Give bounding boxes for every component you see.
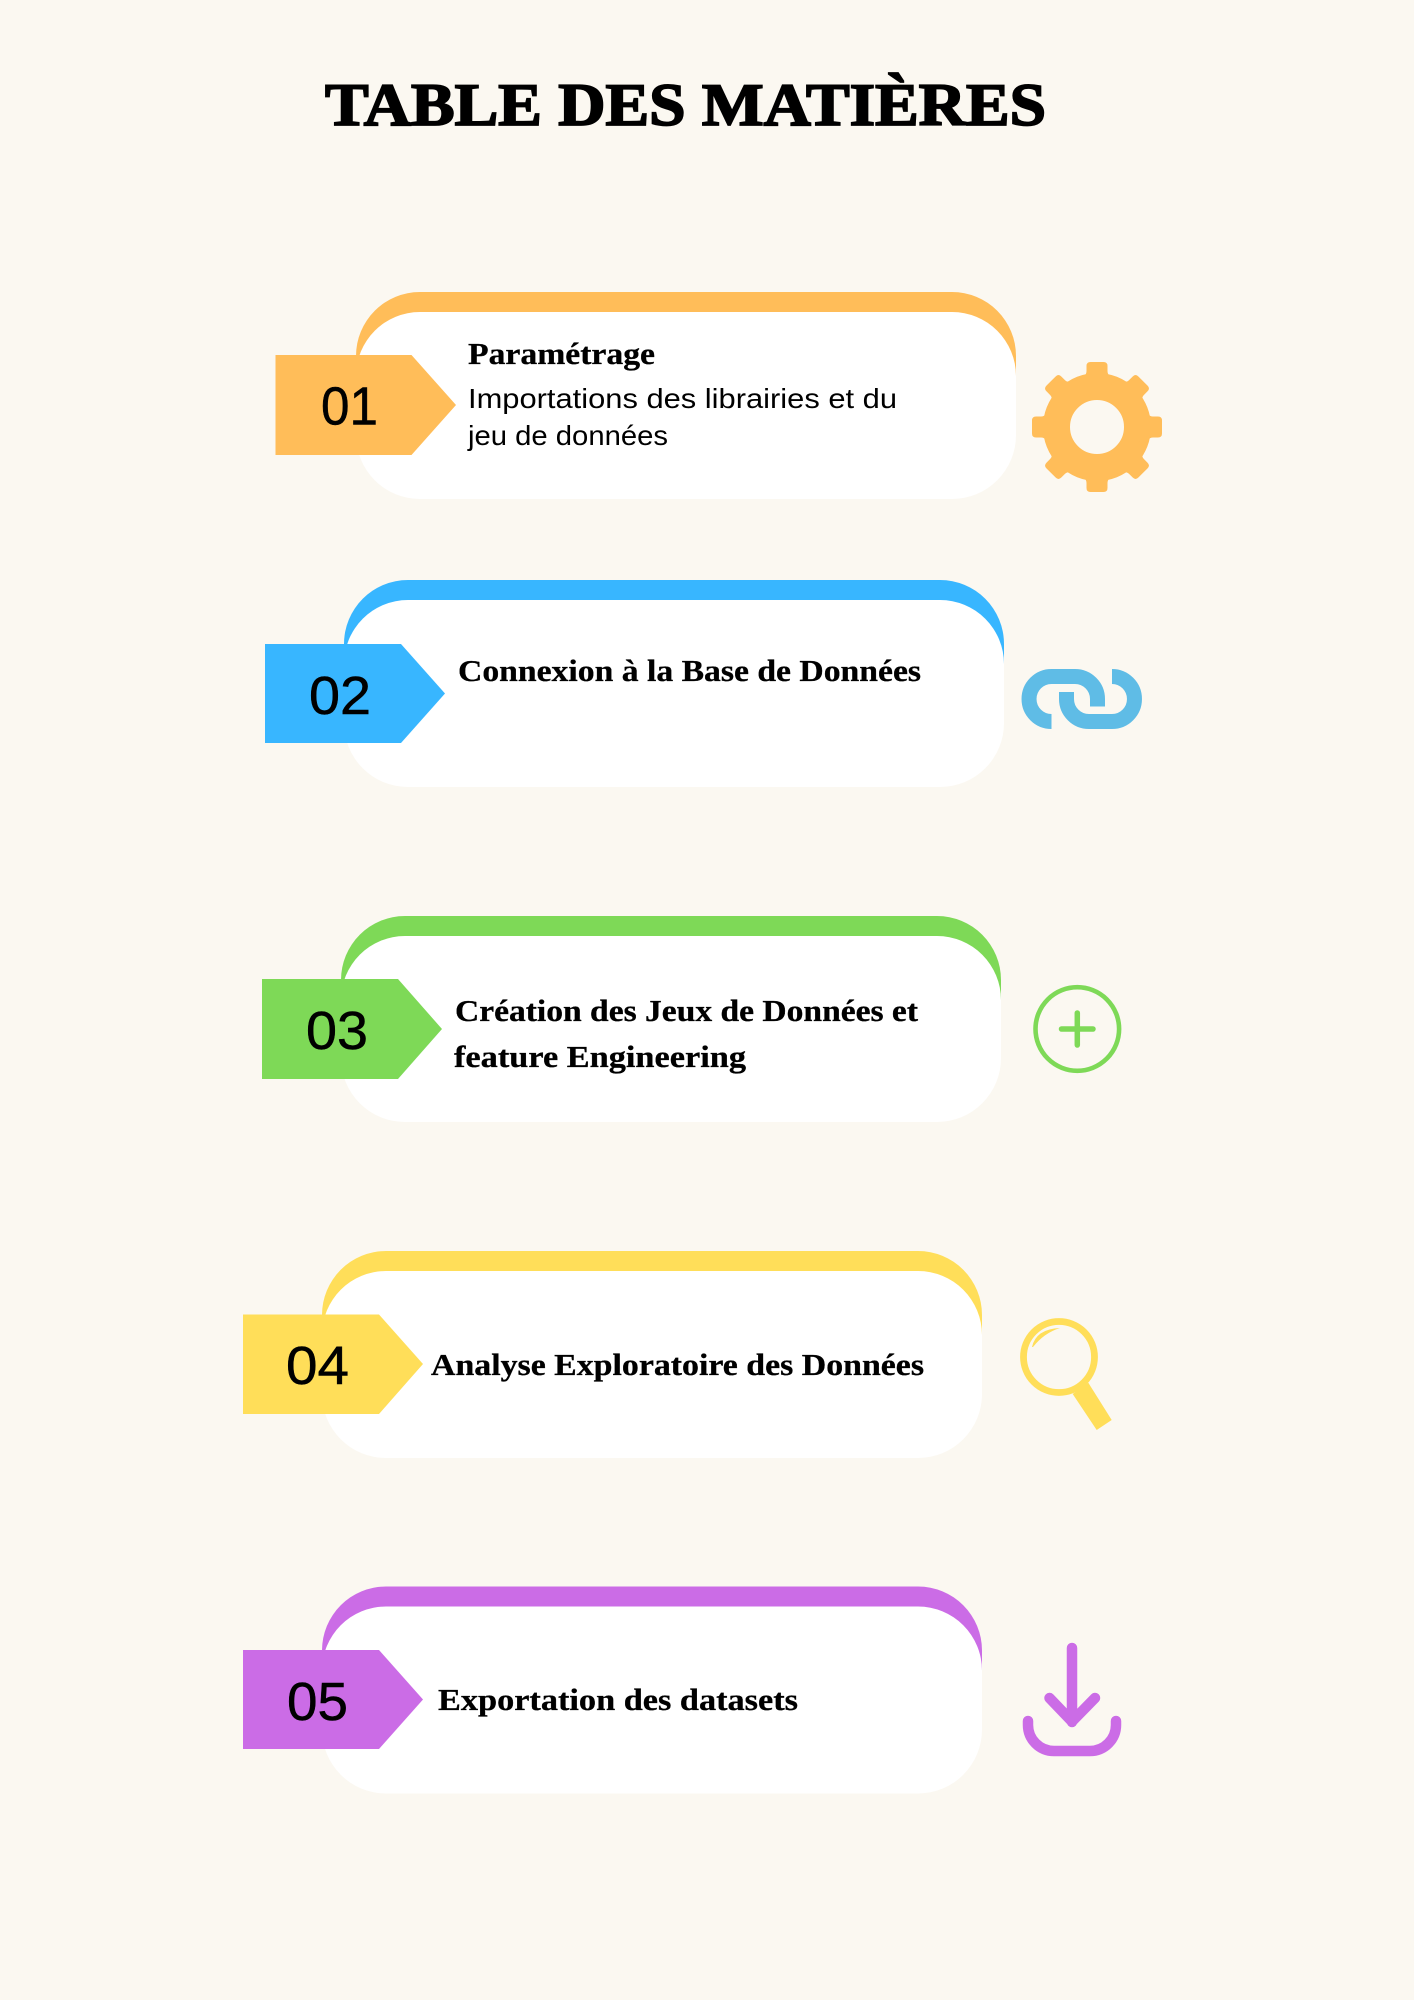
number tag 04 bbox=[243, 1314, 423, 1414]
icon: plus in circle bbox=[1036, 987, 1119, 1071]
panel: 03 Création bbox=[262, 916, 1001, 1122]
heading: Création: feature Engineering bbox=[454, 1039, 747, 1074]
number tag 01 bbox=[276, 355, 456, 455]
panel: 05 Exportation bbox=[243, 1586, 982, 1794]
icon: link bbox=[1029, 676, 1134, 722]
title: TABLE DES MATIÈRES bbox=[325, 72, 1046, 138]
number tag 02: 02 bbox=[309, 666, 371, 726]
text block: description: Importations des librairies et du bbox=[468, 383, 897, 414]
number tag 01: 01 bbox=[321, 376, 378, 436]
heading: Exportation: Exportation des datasets bbox=[438, 1682, 798, 1717]
number tag 05 bbox=[243, 1650, 423, 1749]
icon: download bbox=[1028, 1648, 1116, 1751]
heading: Création bbox=[454, 993, 919, 1074]
heading: Paramétrage: Paramétrage bbox=[468, 336, 655, 371]
number tag 04: 04 bbox=[286, 1336, 349, 1396]
number tag 02 bbox=[265, 644, 445, 743]
panel: 01 Paramétrage bbox=[276, 292, 1016, 499]
text block: description bbox=[467, 383, 897, 451]
number tag 05: 05 bbox=[287, 1672, 348, 1732]
panel: 02 Connexion bbox=[265, 580, 1004, 787]
number tag 03: 03 bbox=[306, 1001, 368, 1061]
heading: Création: Création des Jeux de Données et bbox=[455, 993, 919, 1028]
panel: 04 Analyse bbox=[243, 1251, 982, 1458]
heading: Connexion: Connexion à la Base de Données bbox=[458, 653, 921, 688]
number tag 03 bbox=[262, 979, 442, 1079]
heading: Analyse: Analyse Exploratoire des Données bbox=[431, 1347, 924, 1382]
icon: magnifying glass bbox=[1024, 1322, 1112, 1430]
icon: gear bbox=[1032, 362, 1162, 492]
text block: description: jeu de données bbox=[467, 420, 668, 451]
